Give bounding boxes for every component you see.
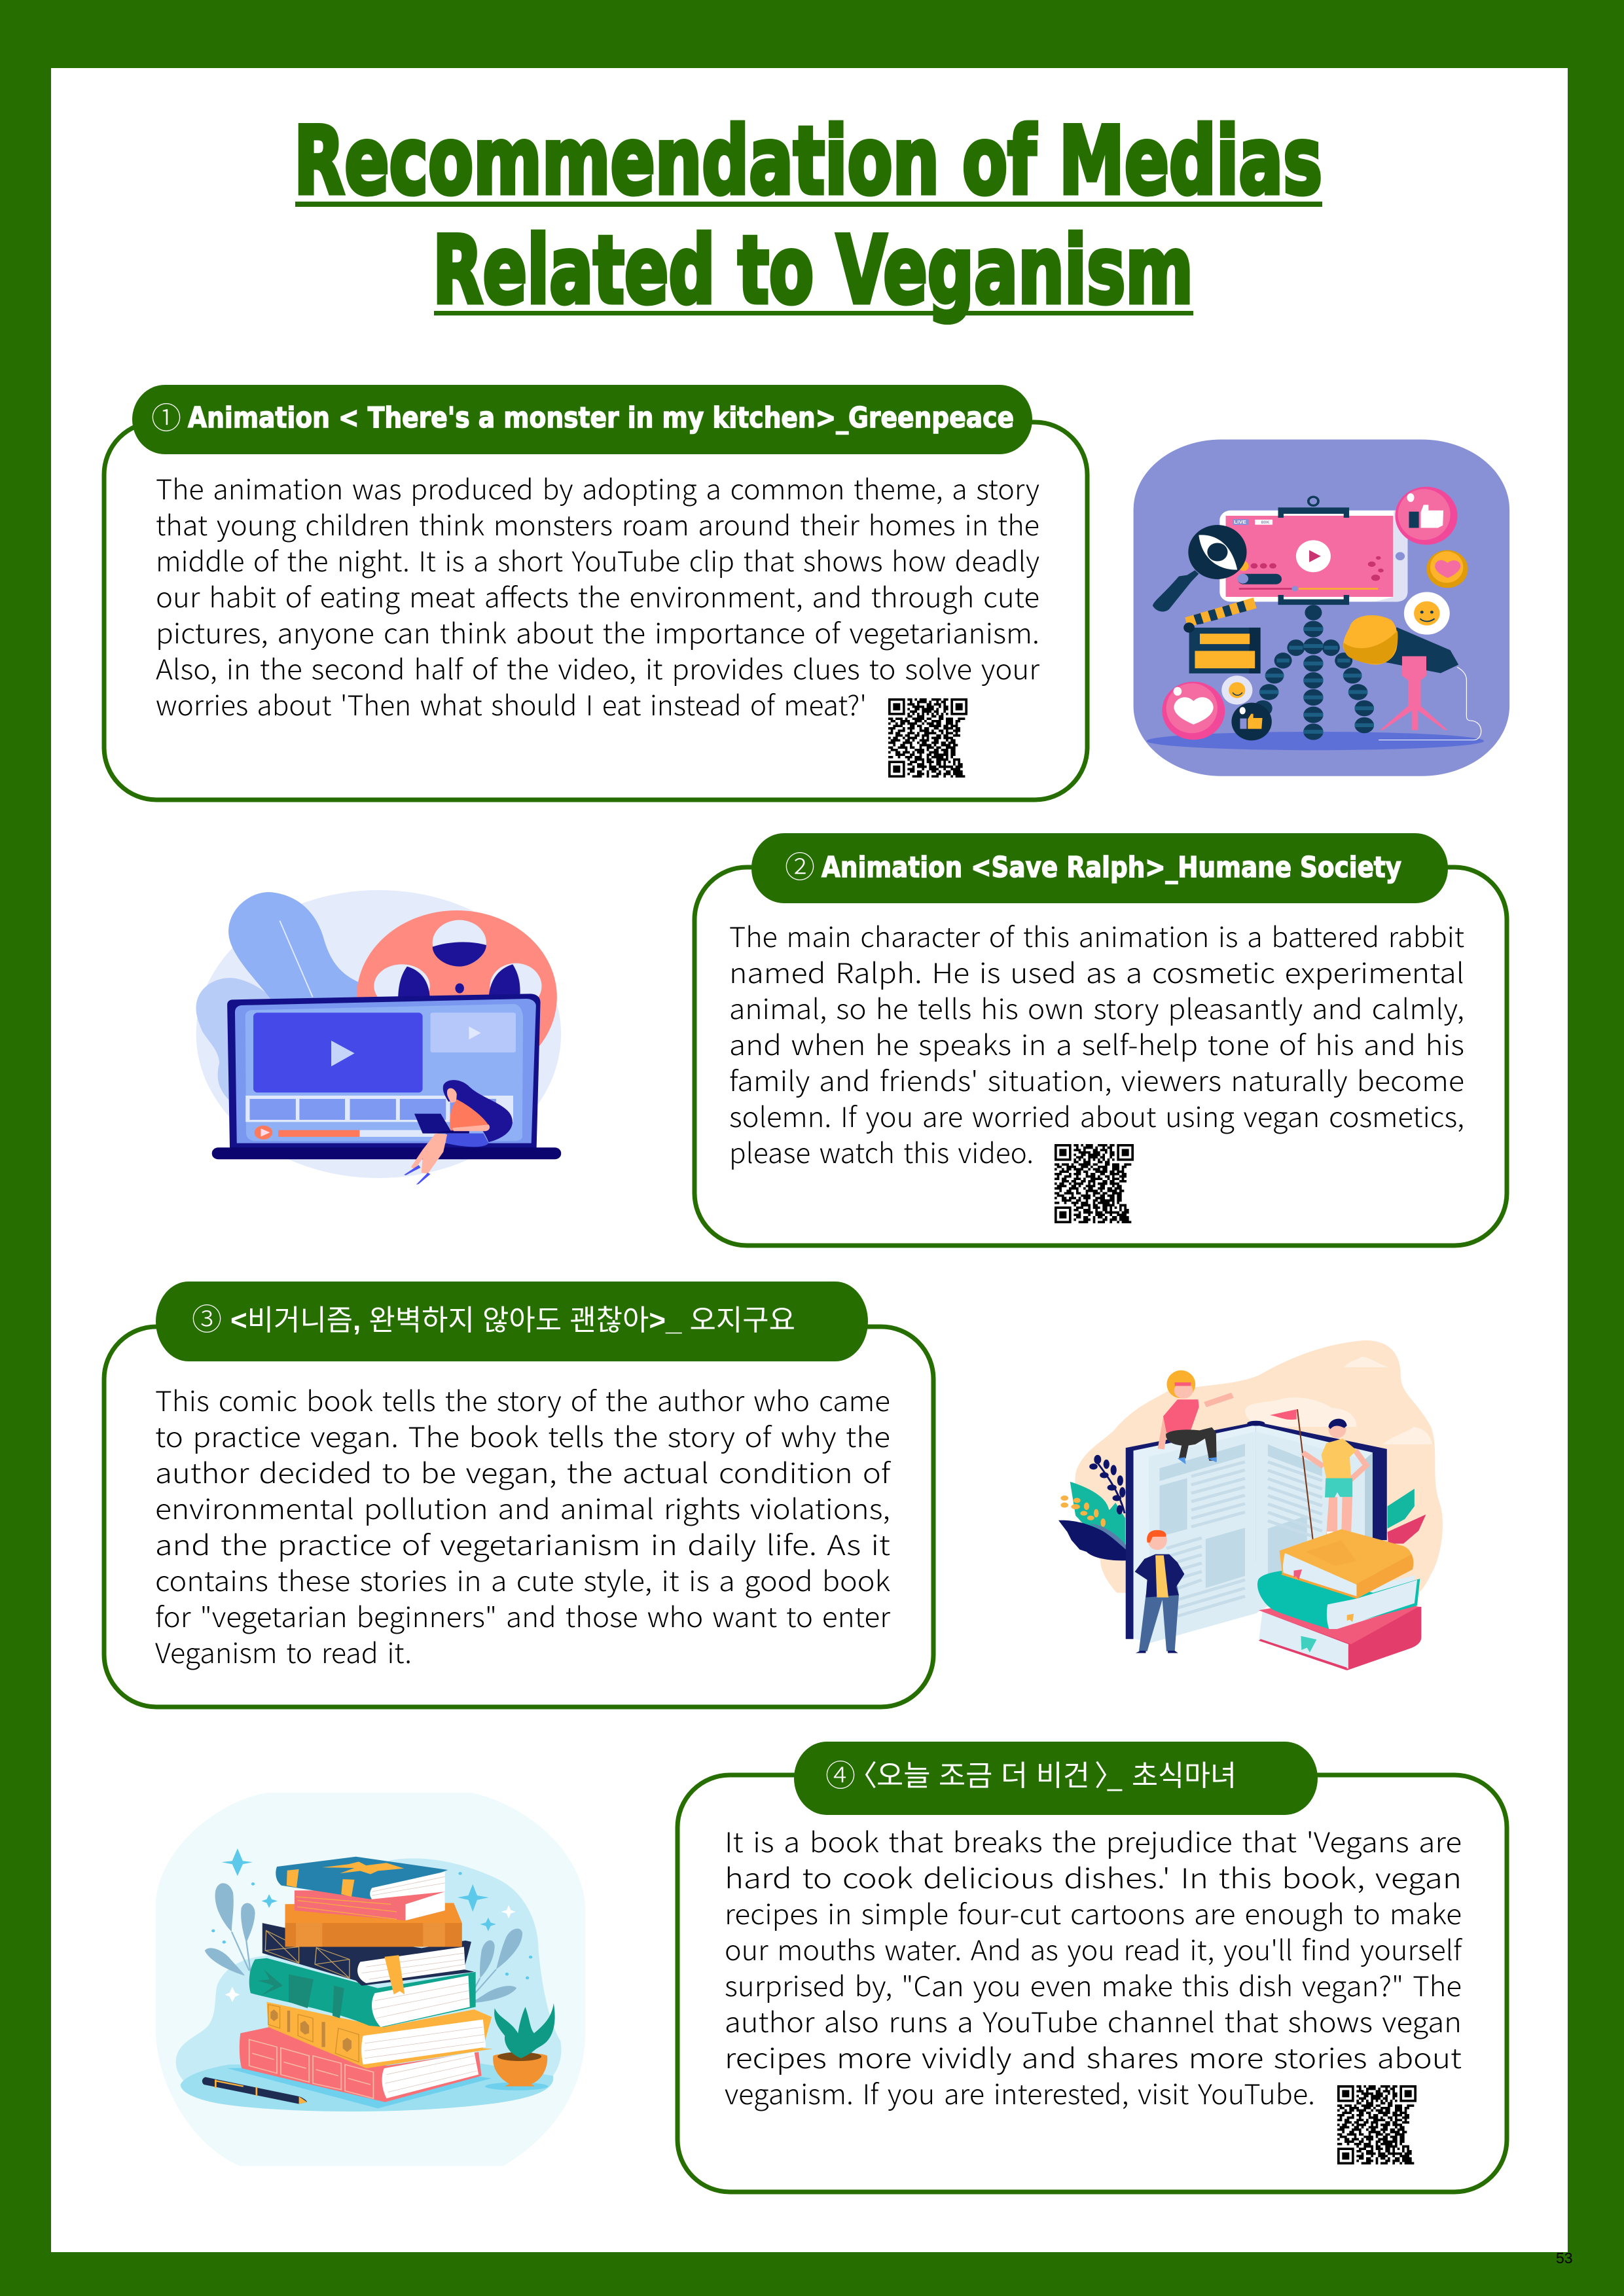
body text 4 xyxy=(725,1821,1463,2113)
heading pill 4: 초식마녀 xyxy=(1132,1760,1236,1792)
heading pill 4 xyxy=(794,1742,1318,1815)
heading pill 4: _ xyxy=(1107,1760,1122,1792)
body text 3: This comic book tells the story of the author who came xyxy=(155,1380,890,1420)
panel 3: Veganism, it's okay not to be perfect xyxy=(104,1282,933,1707)
illustration: stack of books with plant and pen xyxy=(156,1793,585,2166)
body text 1: The animation was produced by adopting a common theme, a story xyxy=(156,468,1039,508)
body text 4: It is a book that breaks the prejudice that 'Vegans are xyxy=(725,1821,1462,1861)
body text 3: and the practice of vegetarianism in daily life. As it xyxy=(155,1524,890,1564)
body text 3: environmental pollution and animal rights violations, xyxy=(155,1488,890,1528)
body text 2: animal, so he tells his own story pleasantly and calmly, xyxy=(729,988,1464,1028)
body text 2 xyxy=(729,916,1464,1172)
heading pill 3: <비거니즘, 완벽하지 않아도 괜찮아>_ 오지구요 xyxy=(230,1304,795,1336)
heading pill 3: ③ xyxy=(192,1296,222,1339)
illustration: live video streaming on a tripod: LIVE xyxy=(1234,520,1246,525)
body text 2: named Ralph. He is used as a cosmetic experimental xyxy=(729,952,1464,992)
body text 4: hard to cook delicious dishes.' In this book, vegan xyxy=(725,1857,1462,1897)
body text 3: contains these stories in a cute style, it is a good book xyxy=(155,1560,890,1600)
body text 4: surprised by, "Can you even make this dish vegan?" The xyxy=(725,1965,1462,2005)
panel 4: A little more vegan today xyxy=(677,1742,1507,2192)
body text 2: and when he speaks in a self-help tone of his and his xyxy=(729,1024,1464,1064)
body text 2: The main character of this animation is a battered rabbit xyxy=(729,916,1464,956)
body text 3 xyxy=(155,1380,892,1672)
title: Related to Veganism xyxy=(433,217,1193,325)
heading pill 2: Animation <Save Ralph>_Humane Society xyxy=(821,851,1401,884)
body text 4: our mouths water. And as you read it, you'll find yourself xyxy=(725,1929,1463,1969)
QR code 3 xyxy=(1337,2085,1416,2164)
QR code 1 xyxy=(888,698,967,778)
body text 1: worries about 'Then what should I eat instead of meat?' xyxy=(156,684,867,724)
body text 4: recipes more vividly and shares more stories about xyxy=(725,2037,1462,2077)
body text 3: Veganism to read it. xyxy=(155,1632,412,1672)
heading pill 4: 〉 xyxy=(1094,1760,1123,1792)
title xyxy=(294,107,1322,325)
body text 4: author also runs a YouTube channel that shows vegan xyxy=(725,2001,1462,2041)
heading pill 2: ② xyxy=(785,844,815,887)
body text 3: for "vegetarian beginners" and those who want to enter xyxy=(155,1596,891,1636)
body text 2: family and friends' situation, viewers naturally become xyxy=(729,1060,1464,1100)
body text 2: solemn. If you are worried about using vegan cosmetics, xyxy=(729,1096,1464,1136)
heading pill 1: Animation < There's a monster in my kitchen>_Greenpeace xyxy=(188,401,1014,435)
panel 1: There's a monster in my kitchen xyxy=(104,385,1087,800)
body text 1: pictures, anyone can think about the importance of vegetarianism. xyxy=(156,612,1039,652)
body text 2: please watch this video. xyxy=(729,1132,1034,1172)
heading pill 1 xyxy=(132,385,1032,454)
heading pill 4: ④ xyxy=(825,1752,856,1795)
heading pill 4: 〈 xyxy=(848,1760,877,1792)
illustration: laptop with film reel and woman xyxy=(196,890,561,1185)
body text 3: author decided to be vegan, the actual condition of xyxy=(155,1452,892,1492)
body text 4: recipes in simple four-cut cartoons are enough to make xyxy=(725,1893,1462,1933)
body text 1: Also, in the second half of the video, it provides clues to solve your xyxy=(156,648,1040,688)
body text 3: to practice vegan. The book tells the story of why the xyxy=(155,1416,890,1456)
illustration: giant open book with people and stacked books xyxy=(1058,1340,1443,1670)
body text 1: middle of the night. It is a short YouTube clip that shows how deadly xyxy=(156,540,1039,580)
illustration: live video streaming on a tripod: 80K xyxy=(1261,520,1270,525)
heading pill 3 xyxy=(156,1282,868,1361)
heading pill 1: ① xyxy=(151,395,181,438)
body text 4: veganism. If you are interested, visit YouTube. xyxy=(725,2073,1315,2113)
heading pill 2 xyxy=(751,833,1448,903)
QR code 2 xyxy=(1055,1144,1134,1223)
body text 1 xyxy=(156,468,1040,724)
body text 1: that young children think monsters roam around their homes in the xyxy=(156,504,1039,544)
illustration: live video streaming on a tripod xyxy=(1134,439,1509,776)
panel 2: Save Ralph xyxy=(695,833,1507,1246)
body text 1: our habit of eating meat affects the environment, and through cute xyxy=(156,576,1039,616)
heading pill 4: 오늘 조금 더 비건 xyxy=(876,1760,1090,1792)
page number: 53 xyxy=(1556,2250,1573,2267)
